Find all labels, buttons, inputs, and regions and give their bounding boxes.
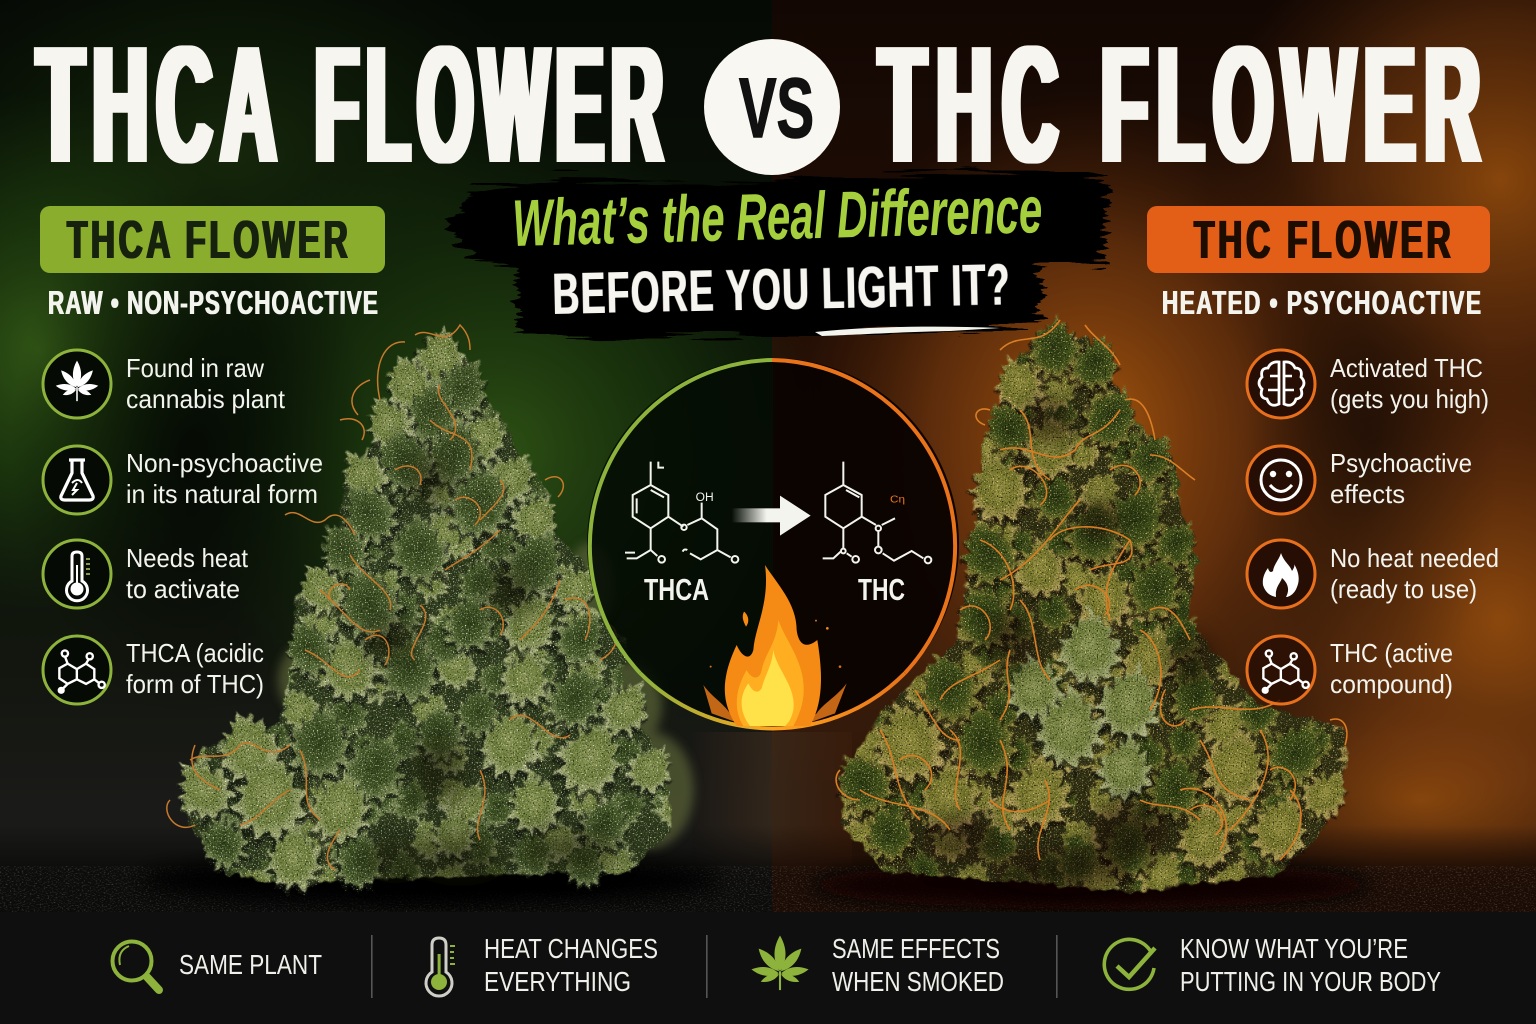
- bud shading: [920, 396, 1212, 894]
- item: heat changes everything: HEAT CHANGES: [484, 933, 658, 964]
- item: no heat needed: (ready to use): [1330, 574, 1477, 604]
- title left: THCA: THCA: [37, 10, 276, 198]
- item: same effects when smoked: WHEN SMOKED: [832, 966, 1004, 997]
- badge: THC flower: THC FLOWER: [1194, 209, 1451, 270]
- right cannabis bud: [810, 313, 1370, 909]
- item: found in raw cannabis plant: cannabis plant: [126, 384, 286, 414]
- VS badge: VS: [739, 61, 814, 155]
- label: THC: THC: [858, 572, 905, 607]
- item: activated THC: Activated THC: [1330, 353, 1483, 383]
- item: no heat needed: [1247, 540, 1499, 608]
- icon: check circle: [1104, 939, 1155, 989]
- underline swoosh: [815, 327, 1000, 336]
- icon: brain: [1247, 350, 1315, 418]
- tagline: RAW • NON-PSYCHOACTIVE: [48, 284, 378, 321]
- item: THCA acidic form: [43, 636, 264, 704]
- title brush background: [450, 170, 1110, 338]
- arrow: [732, 496, 811, 536]
- item: non-psychoactive: in its natural form: [126, 479, 318, 509]
- badge: THC flower: [1147, 206, 1490, 273]
- item: THC active compound: compound): [1330, 669, 1453, 699]
- orange glow: [800, 0, 1536, 920]
- background left: [0, 0, 772, 912]
- item: THC active compound: [1247, 636, 1453, 704]
- item: activated THC: [1247, 350, 1489, 418]
- item: no heat needed: No heat needed: [1330, 543, 1499, 573]
- item: know what you're putting in your body: KNOW WHAT YOU’RE: [1180, 933, 1408, 964]
- item: same effects when smoked: SAME EFFECTS: [832, 933, 1000, 964]
- subtitle: Before you light it?: BEFORE YOU LIGHT IT?: [552, 253, 1010, 327]
- icon: smile: [1247, 446, 1315, 514]
- molecule: THC: [823, 462, 931, 563]
- item: THCA acidic form: form of THC): [126, 669, 264, 699]
- item: found in raw cannabis plant: Found in raw: [126, 353, 264, 383]
- item: same plant: [112, 942, 322, 990]
- right panel: THC flower: [1147, 206, 1499, 704]
- title left: FLOWER: FLOWER: [315, 13, 663, 198]
- subtitle: What's the Real Difference: What’s the Real Difference: [511, 172, 1043, 260]
- item: psychoactive effects: [1247, 446, 1472, 514]
- title right: THC: THC: [879, 10, 1058, 198]
- item: psychoactive effects: Psychoactive: [1330, 448, 1472, 478]
- ring: [590, 360, 955, 728]
- green glow: [0, 0, 820, 780]
- item: needs heat: to activate: [126, 574, 240, 604]
- item: psychoactive effects: effects: [1330, 479, 1405, 509]
- VS badge: [704, 39, 840, 175]
- item: same effects when smoked: [751, 933, 1004, 997]
- icon: flame: [1247, 540, 1315, 608]
- icon: molecule: [1247, 636, 1315, 704]
- molecule label: OH: OH: [696, 490, 714, 504]
- conversion diagram circle: [587, 358, 959, 730]
- bottom bar: [0, 912, 1536, 1024]
- item: THCA acidic form: THCA (acidic: [126, 638, 264, 668]
- icon: thermometer: [426, 938, 455, 996]
- item: same plant: SAME PLANT: [179, 949, 322, 980]
- item: activated THC: (gets you high): [1330, 384, 1489, 414]
- molecule: THCA: [625, 462, 738, 563]
- item: non-psychoactive: Non-psychoactive: [126, 448, 323, 478]
- bud body: [182, 340, 672, 886]
- item: heat changes everything: [426, 933, 658, 997]
- icon: cannabis leaf: [751, 936, 809, 990]
- label: THCA: THCA: [644, 572, 709, 607]
- item: found in raw cannabis plant: [43, 350, 286, 418]
- circle disc: [587, 358, 959, 730]
- item: heat changes everything: EVERYTHING: [484, 966, 631, 997]
- blurred back lobes: [278, 543, 694, 848]
- icon: flask: [43, 446, 111, 514]
- title right: FLOWER: FLOWER: [1101, 10, 1480, 198]
- item: needs heat: [43, 540, 249, 608]
- item: know what you're putting in your body: PUTTING IN YOUR BODY: [1180, 966, 1441, 997]
- icon: thermometer: [43, 540, 111, 608]
- tabletop: [0, 732, 1536, 912]
- left cannabis bud: [140, 321, 720, 906]
- tagline: HEATED • PSYCHOACTIVE: [1162, 284, 1481, 321]
- bud body: [842, 330, 1345, 892]
- item: needs heat: Needs heat: [126, 543, 249, 573]
- icon: cannabis leaf: [43, 350, 111, 418]
- bud shading: [364, 450, 620, 886]
- badge: THCA flower: THCA FLOWER: [67, 209, 348, 270]
- item: know what you're putting in your body: [1104, 933, 1441, 997]
- main title: [37, 10, 1480, 198]
- icon: magnifier: [112, 942, 159, 990]
- molecule label: orange: Cη: [890, 494, 905, 505]
- item: THC active compound: THC (active: [1330, 638, 1453, 668]
- left panel: THCA flower: [40, 206, 385, 704]
- item: non-psychoactive: [43, 446, 323, 514]
- background right: [772, 0, 1536, 912]
- flame: [703, 565, 847, 726]
- icon: molecule: [43, 636, 111, 704]
